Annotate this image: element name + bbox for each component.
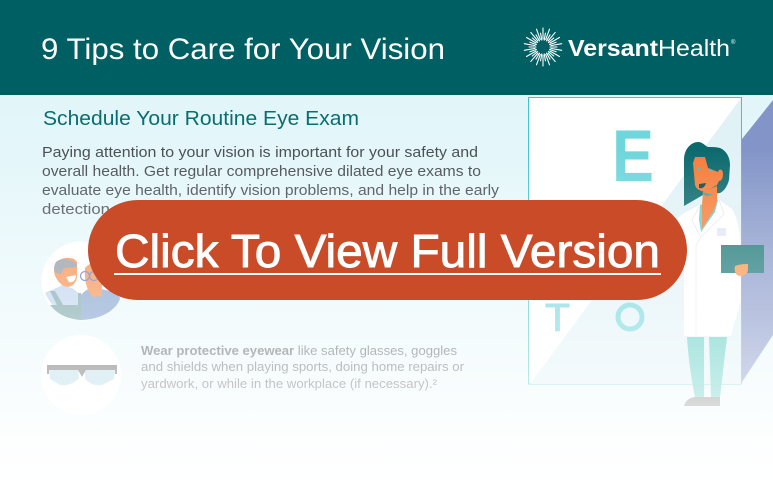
intro paragraph bbox=[42, 145, 500, 218]
neck bbox=[702, 186, 717, 229]
woman glasses bbox=[80, 272, 90, 280]
intro paragraph: detection bbox=[42, 202, 110, 218]
hand bbox=[735, 264, 748, 276]
man hair bbox=[54, 259, 77, 274]
man head bbox=[54, 258, 77, 287]
intro paragraph: overall health. Get regular comprehensive dilated eye exams to bbox=[42, 164, 481, 180]
lenses bbox=[49, 369, 79, 385]
logo: Versant Health bbox=[524, 28, 736, 66]
wordmark: Versant Health bbox=[568, 35, 730, 61]
tip: wear protective eyewear: Wear protective eyewear like safety glasses, goggles bbox=[141, 343, 457, 358]
coat pocket badge bbox=[717, 228, 726, 236]
tip: wear protective eyewear bbox=[141, 343, 465, 391]
tip: wear protective eyewear: and shields when playing sports, doing home repairs or bbox=[141, 359, 465, 374]
eye chart letter E: E bbox=[612, 116, 654, 197]
man shirt bbox=[45, 285, 80, 320]
shoes bbox=[684, 397, 720, 406]
sunburst icon bbox=[524, 28, 562, 66]
teal scrubs bbox=[699, 200, 718, 232]
purple wall shape bbox=[742, 100, 773, 382]
teal neck line bbox=[702, 192, 713, 196]
eye chart letter T: T bbox=[545, 297, 570, 340]
illustration: doctor bbox=[678, 142, 764, 406]
title: 9 Tips to Care for Your Vision bbox=[41, 33, 445, 66]
icon: protective glasses bbox=[41, 335, 121, 415]
white fade overlay bbox=[0, 150, 773, 500]
eye chart letter O bbox=[618, 305, 642, 329]
man overalls bbox=[50, 291, 81, 320]
intro paragraph: Paying attention to your vision is important for your safety and bbox=[42, 145, 478, 161]
hair bbox=[684, 142, 730, 206]
icon: elderly couple bbox=[42, 242, 120, 320]
button: click to view full version bbox=[88, 200, 687, 300]
registered mark: ® bbox=[731, 39, 736, 46]
header banner bbox=[0, 0, 773, 95]
face bbox=[693, 157, 723, 192]
panel: eye chart bbox=[528, 98, 742, 384]
tip: wear protective eyewear: yardwork, or while in the workplace (if necessary).² bbox=[141, 376, 438, 391]
frame bbox=[47, 365, 117, 377]
clipboard bbox=[721, 245, 764, 273]
legs bbox=[687, 337, 704, 397]
button underline bbox=[114, 273, 661, 275]
woman head bbox=[85, 263, 102, 297]
heading: schedule your routine eye exam: Schedule Your Routine Eye Exam bbox=[43, 107, 359, 130]
woman top bbox=[80, 287, 120, 320]
man smile bbox=[66, 275, 76, 282]
coat lapels and center line bbox=[692, 200, 724, 336]
intro paragraph: evaluate eye health, identify vision problems, and help in the early bbox=[42, 183, 500, 199]
white coat bbox=[678, 199, 741, 336]
button label: Click To View Full Version bbox=[115, 225, 660, 277]
